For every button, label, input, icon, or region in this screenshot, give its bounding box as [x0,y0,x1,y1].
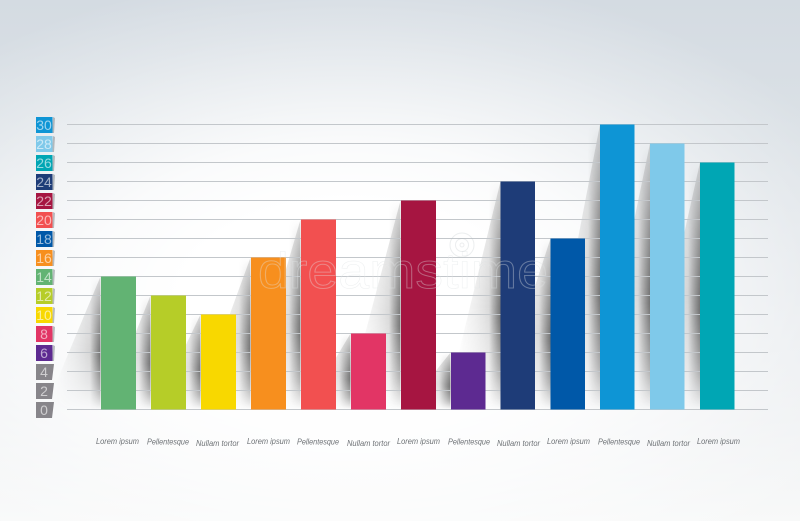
tile 6 [36,345,55,361]
tile 22: 22 [36,193,52,209]
x axis labels: Nullam tortor [347,438,391,448]
watermark: dreamstime [258,243,548,299]
bar: 28 sky blue [650,144,684,410]
x axis labels: Pellentesque [147,436,189,446]
x axis labels: Lorem ipsum [697,436,740,446]
x axis labels: Lorem ipsum [96,436,139,446]
tile 18: 18 [36,231,52,247]
bar: 30 bright blue [600,124,634,410]
bar: 18 blue [550,238,585,410]
x axis labels: Lorem ipsum [247,436,290,446]
bar: 26 teal [700,162,734,410]
watermark: dreamstime [258,243,548,299]
x axis labels: Pellentesque [448,436,490,446]
tile 2: 2 [40,383,48,399]
tile 12: 12 [36,288,52,304]
tile 20: 20 [36,212,52,228]
y axis value tiles [36,117,55,418]
tile 8: 8 [40,326,48,342]
tile 4 [36,364,54,380]
bar: 16 orange [251,258,286,410]
x axis labels [96,436,740,448]
bar shadows [45,124,700,410]
x axis labels: Nullam tortor [497,438,541,448]
x axis labels: Lorem ipsum [547,436,590,446]
tile 24: 24 [36,174,52,190]
bar: 10 yellow [201,314,236,410]
tile 0: 0 [40,402,48,418]
x axis labels: Pellentesque [598,436,640,446]
tile 0 [36,402,54,418]
tile 8 [36,326,55,342]
bar: 12 lime [151,296,186,410]
bar: 22 crimson [401,200,436,410]
tile 2 [36,383,54,399]
tile 6: 6 [40,345,48,361]
tile 28: 28 [36,136,52,152]
tile 4: 4 [40,364,48,380]
tile 26: 26 [36,155,52,171]
tile 14: 14 [36,269,52,285]
bar: 8 pink [351,334,386,410]
x axis labels: Lorem ipsum [397,436,440,446]
bar: 20 coral [301,220,336,410]
tile 30: 30 [36,117,52,133]
tile 10: 10 [36,307,52,323]
tile 16: 16 [36,250,52,266]
bar: 24 navy [500,182,535,410]
x axis labels: Nullam tortor [647,438,691,448]
bar: 6 purple [451,352,486,410]
x axis labels: Pellentesque [297,436,339,446]
bars [101,124,734,410]
x axis labels: Nullam tortor [196,438,240,448]
infographic: bar chart [36,117,768,446]
bar: 14 green [101,276,136,410]
